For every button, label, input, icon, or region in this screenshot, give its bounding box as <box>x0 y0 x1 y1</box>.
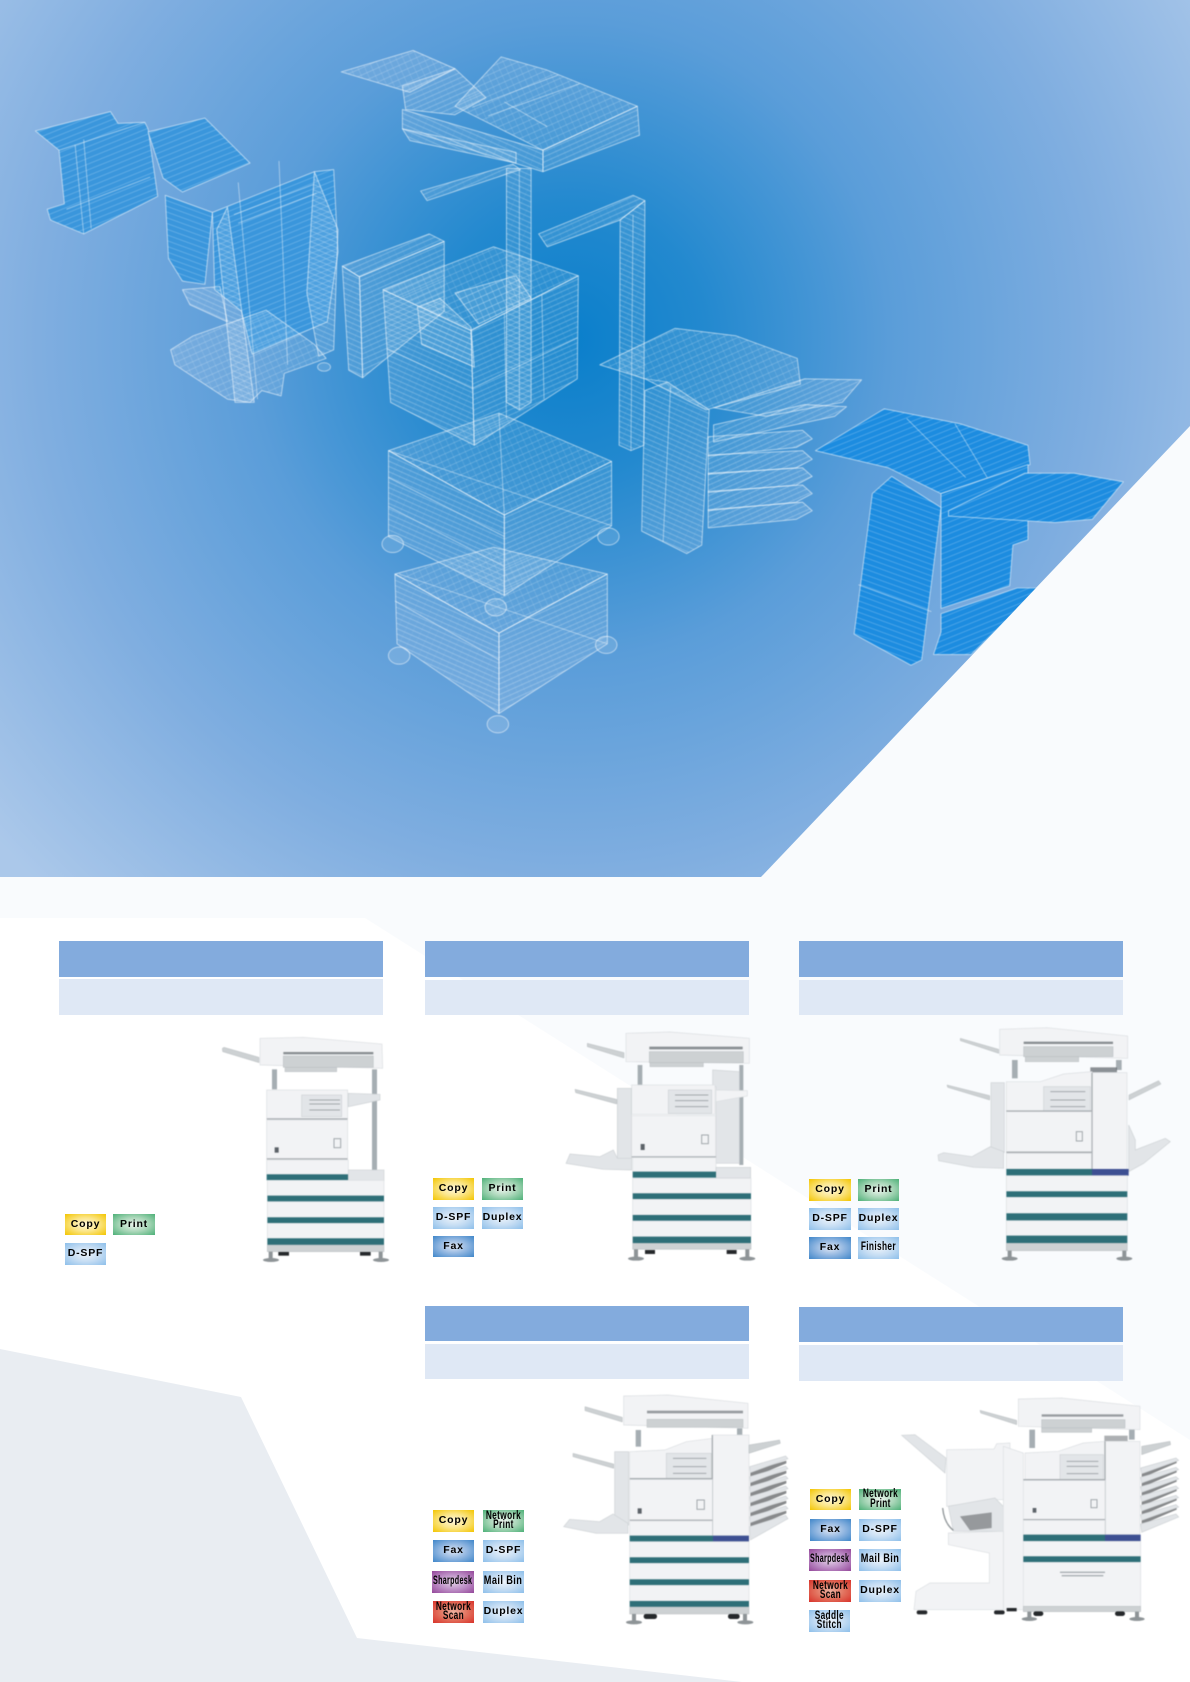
wireframe: support arm and post <box>421 164 531 410</box>
model heading bar <box>799 1307 1123 1342</box>
feature badge: Fax: Fax <box>443 1544 464 1556</box>
feature badge: Sharpdesk: Sharpdesk <box>433 1575 473 1587</box>
panel: model with inner finisher <box>425 941 756 1262</box>
feature badge: Duplex: Duplex <box>484 1605 523 1617</box>
feature badge: Network Print <box>483 1510 524 1532</box>
feature badge: Print: Print <box>489 1182 516 1194</box>
feature badge: Mail Bin <box>483 1571 524 1593</box>
feature badge: Network Scan: Network <box>812 1580 848 1592</box>
feature badge: Sharpdesk <box>809 1549 851 1571</box>
feature badge: Fax <box>809 1237 851 1259</box>
feature badge: Print <box>113 1214 155 1235</box>
model heading bar <box>59 941 383 977</box>
feature badge: Duplex <box>859 1580 901 1602</box>
feature badge: Finisher: Finisher <box>861 1241 896 1253</box>
wireframe: upper drawer unit <box>382 413 619 616</box>
wireframe: left tray unit <box>35 112 158 234</box>
feature badge: Copy <box>433 1178 474 1200</box>
panel: model with finisher <box>799 941 1171 1262</box>
feature badge: Copy: Copy <box>815 1183 845 1195</box>
model heading bar <box>799 941 1123 977</box>
feature badge: Duplex: Duplex <box>483 1211 522 1223</box>
feature badge: Sharpdesk <box>432 1571 474 1593</box>
feature badge: Duplex <box>858 1208 899 1230</box>
feature badge: Copy: Copy <box>71 1218 100 1230</box>
photo: copier with side trays <box>566 1032 756 1262</box>
feature badge: Fax: Fax <box>820 1241 840 1253</box>
panel: model with mail bin <box>425 1306 788 1625</box>
feature badge: Sharpdesk: Sharpdesk <box>810 1553 850 1565</box>
feature badge: Fax: Fax <box>443 1240 464 1252</box>
model heading bar <box>425 1306 749 1341</box>
feature badge: Saddle Stitch: Saddle <box>815 1610 844 1622</box>
feature badge: Network Print: Network <box>862 1488 898 1500</box>
feature badge: D-SPF: D-SPF <box>436 1211 471 1223</box>
photo: full system with saddle finisher <box>901 1397 1180 1622</box>
feature badge: D-SPF: D-SPF <box>812 1212 848 1224</box>
feature badge: Network Print: Print <box>870 1498 890 1510</box>
feature badge: Copy: Copy <box>816 1493 845 1505</box>
feature badge: Mail Bin: Mail Bin <box>861 1553 899 1565</box>
feature badge: Print <box>482 1178 523 1200</box>
model heading bar <box>425 941 749 977</box>
feature badge: D-SPF: D-SPF <box>68 1247 103 1259</box>
feature badge: Fax: Fax <box>820 1523 841 1535</box>
hero gradient panel <box>0 0 1190 877</box>
grey corner shape <box>0 1349 742 1682</box>
feature badge: Network Scan: Network <box>436 1600 471 1612</box>
feature badge: Print <box>858 1179 899 1201</box>
feature badge: Copy <box>65 1214 106 1235</box>
feature badge: D-SPF <box>483 1540 524 1562</box>
wireframe: saddle finisher <box>148 118 338 402</box>
feature badge: Network Print: Network <box>486 1510 521 1522</box>
photo: copier with seven-bin mail tray <box>563 1394 788 1625</box>
model subheading bar <box>425 980 749 1015</box>
feature badge: Copy <box>433 1510 474 1532</box>
wireframe: mail bin unit <box>600 328 862 554</box>
feature badge: Duplex <box>482 1207 523 1229</box>
wireframe: side panel box <box>342 234 444 378</box>
feature badge: Saddle Stitch <box>809 1610 850 1632</box>
model subheading bar <box>799 980 1123 1015</box>
feature badge: Copy: Copy <box>439 1514 468 1526</box>
feature badge: Network Print: Print <box>493 1519 514 1531</box>
feature badge: D-SPF <box>433 1207 474 1229</box>
photo: copier with finisher <box>938 1027 1171 1262</box>
feature badge: Mail Bin: Mail Bin <box>484 1575 523 1587</box>
feature badge: Fax <box>433 1236 474 1257</box>
exploded wireframe of copier modules <box>35 50 1123 733</box>
feature badge: D-SPF <box>65 1243 106 1265</box>
feature badge: D-SPF: D-SPF <box>862 1523 898 1535</box>
wireframe: main copier body <box>383 247 578 445</box>
feature badge: Network Print <box>859 1489 901 1510</box>
feature badge: Print: Print <box>120 1218 148 1230</box>
feature badge: Copy: Copy <box>439 1182 468 1194</box>
feature badge: Network Scan: Scan <box>819 1589 841 1601</box>
model subheading bar <box>799 1345 1123 1381</box>
feature badge: Finisher <box>858 1237 899 1259</box>
feature badge: Fax <box>433 1540 474 1562</box>
wireframe: L-shaped rear support <box>539 195 645 451</box>
model subheading bar <box>59 979 383 1015</box>
wireframe: document feeder scanner <box>341 50 640 172</box>
feature badge: Copy <box>810 1489 851 1510</box>
wireframe: lower drawer unit <box>388 547 617 733</box>
wireframe: large finisher <box>815 409 1123 665</box>
feature badge: Duplex: Duplex <box>860 1584 900 1596</box>
feature badge: Duplex <box>483 1601 524 1623</box>
feature badge: Network Scan <box>433 1601 474 1623</box>
feature badge: D-SPF <box>859 1519 901 1541</box>
feature badge: D-SPF: D-SPF <box>486 1544 521 1556</box>
feature badge: Print: Print <box>865 1183 892 1195</box>
feature badge: Network Scan: Scan <box>443 1610 464 1622</box>
feature badge: D-SPF <box>809 1208 851 1230</box>
feature badge: Copy <box>809 1179 851 1201</box>
feature badge: Saddle Stitch: Stitch <box>817 1619 842 1631</box>
feature badge: Duplex: Duplex <box>859 1212 898 1224</box>
panel: model with saddle stitch finisher <box>799 1307 1180 1632</box>
photo: copier with stand <box>222 1036 390 1263</box>
white lower background <box>0 918 1190 1682</box>
feature badge: Network Scan <box>809 1580 851 1602</box>
model subheading bar <box>425 1344 749 1379</box>
feature badge: Mail Bin <box>859 1549 901 1571</box>
feature badge: Fax <box>810 1519 851 1541</box>
panel: base model <box>59 941 390 1265</box>
